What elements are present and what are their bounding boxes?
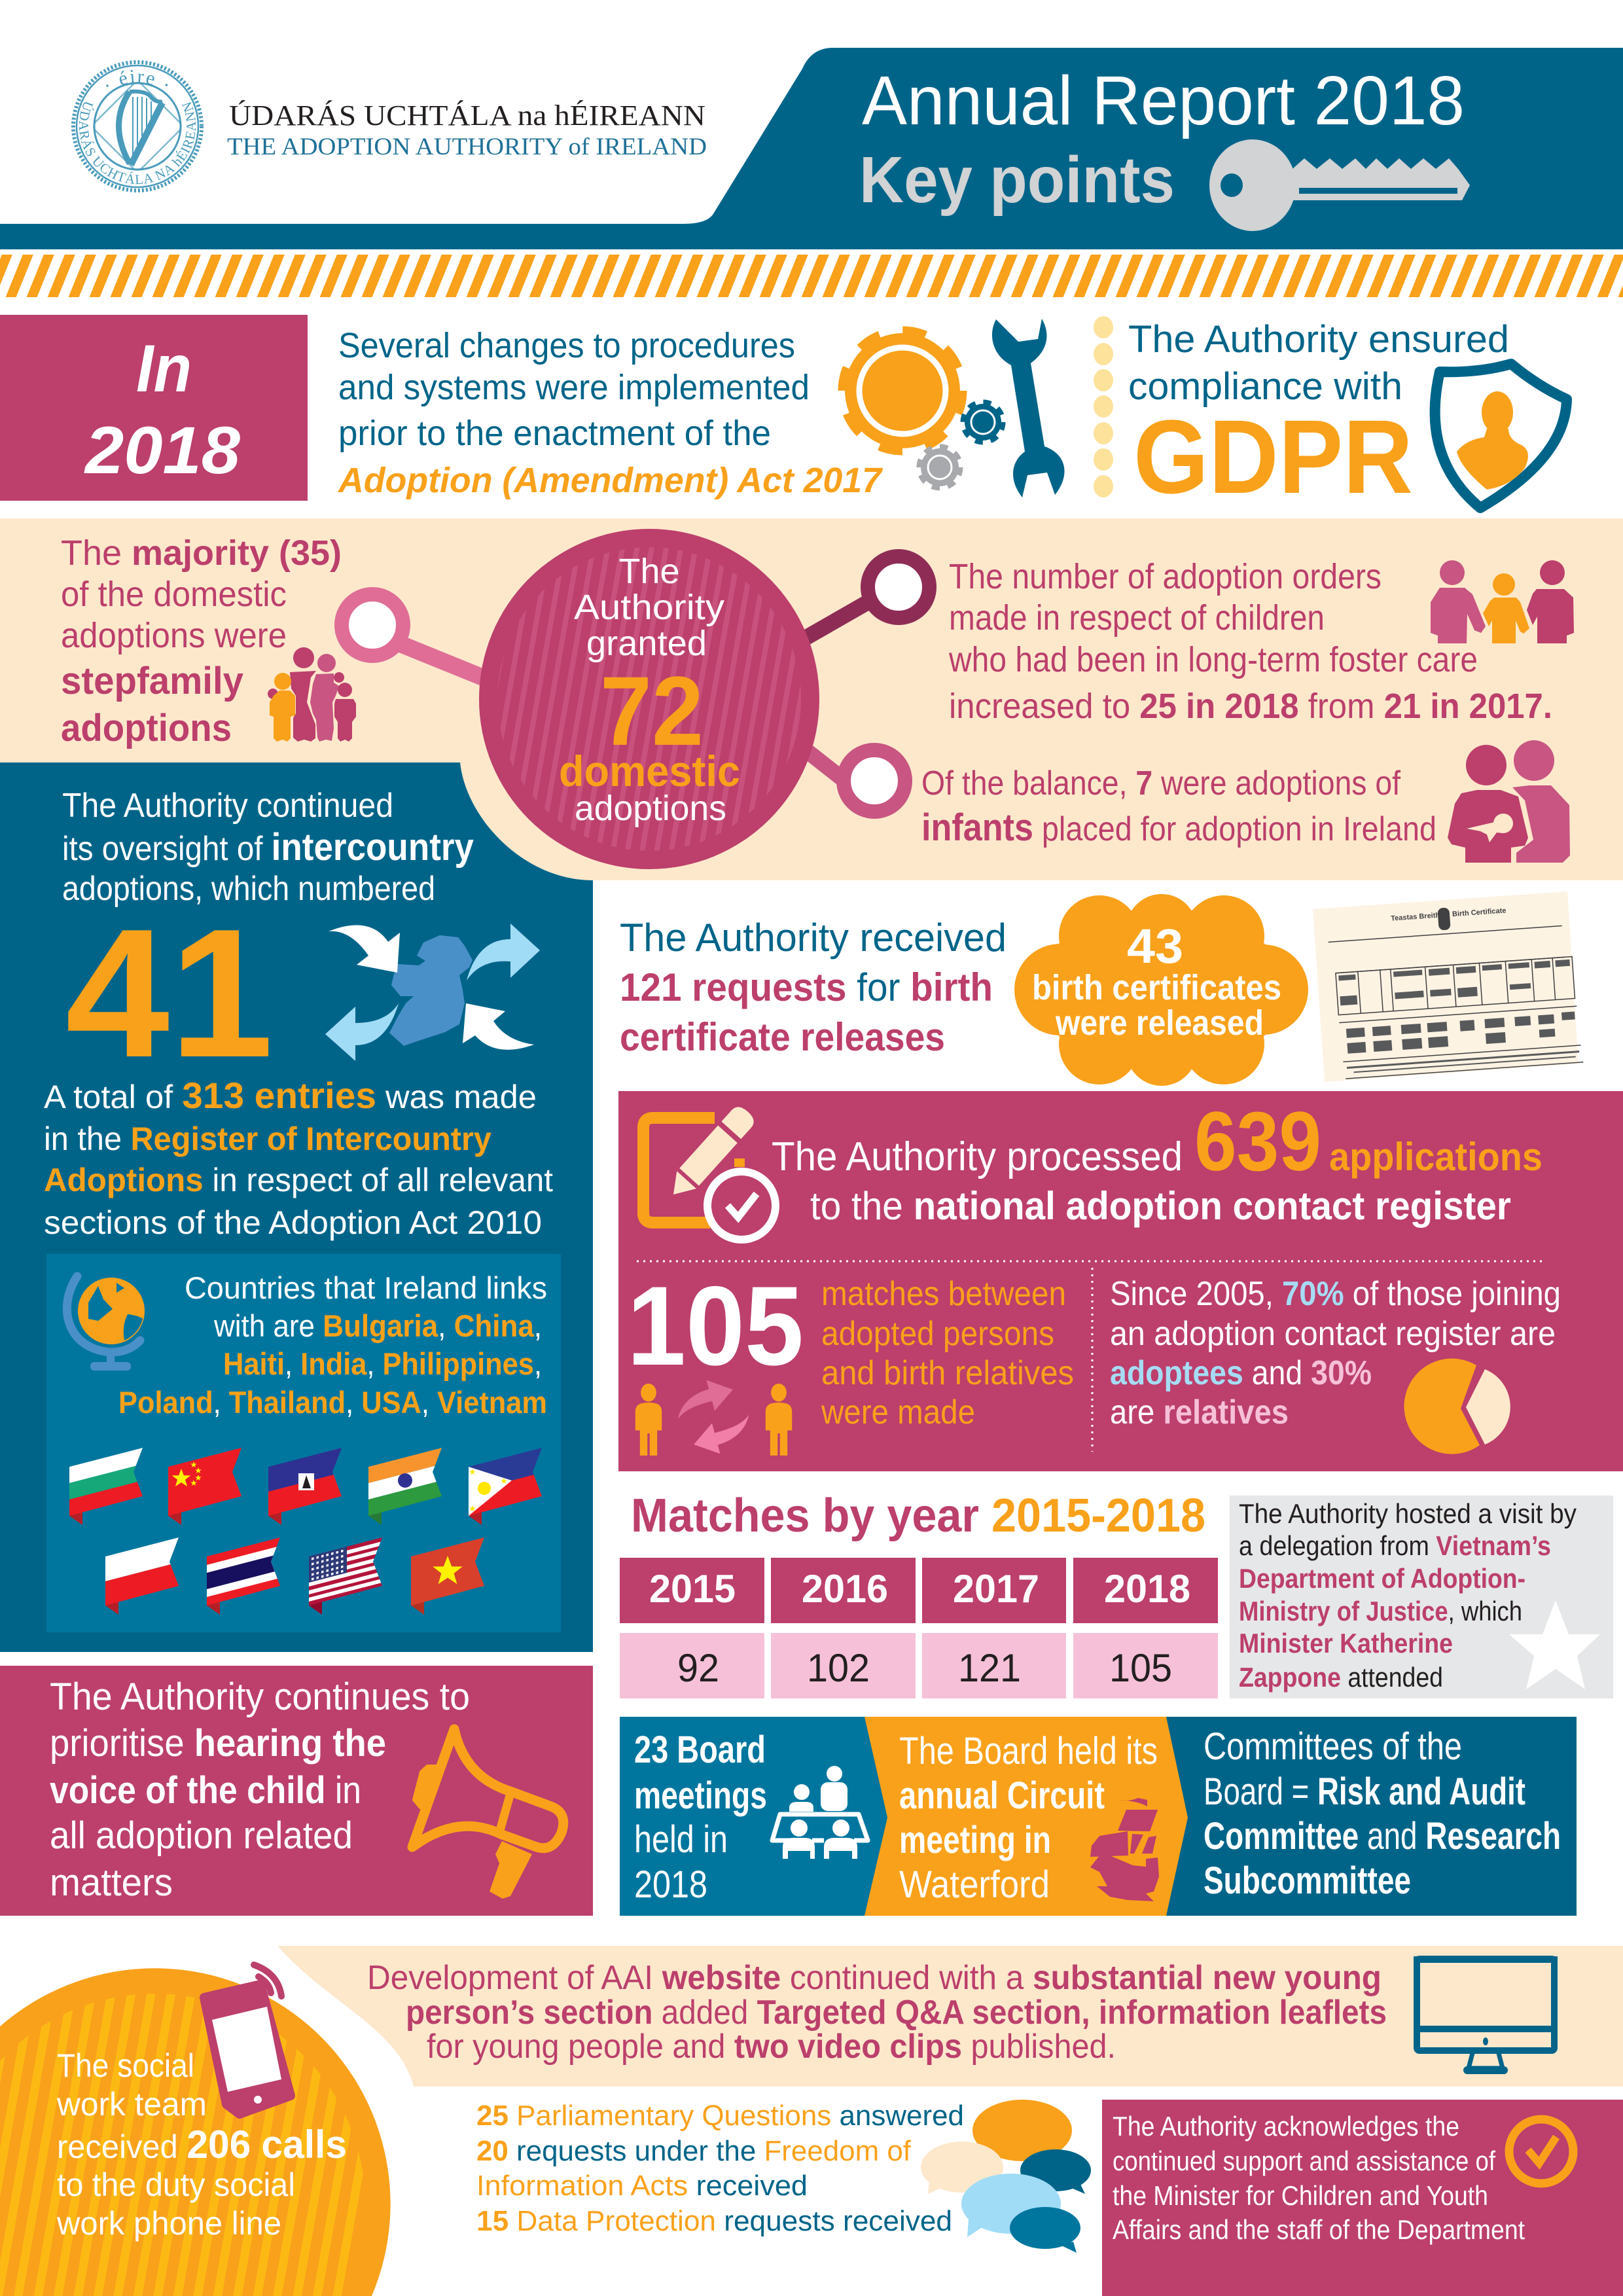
text: majority stepfamily adoptions: adoptions were — [61, 616, 287, 655]
flag: India — [368, 1448, 442, 1525]
text: annual circuit meeting: Waterford — [899, 1863, 1050, 1906]
text: GDPR compliance: GDPR — [1133, 398, 1413, 515]
text: committees of the board — [1204, 1725, 1561, 1902]
table: matches by year: 2017 — [953, 1567, 1039, 1611]
panel: domestic adoptions cream band — [0, 518, 1623, 880]
text: long-term foster care: who had been in long-term foster care — [948, 640, 1478, 679]
icon: ship — [1090, 1798, 1159, 1901]
text: oversight of intercountry — [62, 787, 474, 908]
panel: board activity band — [620, 1717, 1577, 1916]
text: adoptees and relatives: Since 2005, 70% of those joining — [1110, 1275, 1561, 1313]
text: 639 applications: to the national adoption contact register — [810, 1184, 1511, 1228]
central circle: 72 domestic adoptions: 72 — [600, 656, 704, 766]
text: birth certificate requests — [620, 916, 1007, 1059]
text: 23 board meetings — [634, 1729, 767, 1906]
text: oversight of intercountry: adoptions, which numbered — [62, 870, 435, 908]
table: matches by year: 105 — [1109, 1646, 1172, 1690]
icon: check badge — [1509, 2119, 1573, 2183]
panel: national adoption contact register — [618, 1091, 1623, 1471]
icon: stepfamily group — [268, 647, 356, 742]
panel: In 2018: 2018 — [84, 413, 240, 488]
text: annual circuit meeting — [899, 1730, 1158, 1906]
callout: 43 birth certificates cloud: 43 — [1127, 919, 1183, 973]
table: matches by year: 102 — [807, 1646, 870, 1690]
chart: 70/30 pie — [1404, 1359, 1510, 1454]
panel: social work team calls — [0, 1965, 391, 2296]
text: 206 calls: received 206 calls — [57, 2123, 347, 2166]
text: acknowledgement: Affairs and the staff of the Department — [1113, 2214, 1525, 2245]
text: infants placed for adoption: Of the balance, 7 were adoptions of — [921, 764, 1400, 802]
text: 206 calls: The social — [57, 2047, 194, 2084]
text: 639 applications: 639 — [1194, 1095, 1321, 1189]
flag: Philippines — [469, 1448, 542, 1525]
central circle: 72 domestic adoptions: Authority — [574, 588, 724, 627]
text: hearing the voice of the child — [50, 1676, 470, 1904]
flag: Thailand — [207, 1537, 280, 1615]
text: adoptees and relatives: are relatives — [1110, 1393, 1289, 1431]
text: birth certificate requests: certificate releases — [620, 1015, 945, 1059]
text: 23 board meetings: 2018 — [634, 1863, 707, 1906]
panel: intercountry adoptions — [0, 762, 593, 1652]
text: Register of Intercountry Adoptions: A total of 313 entries was made — [44, 1075, 537, 1116]
flag: Vietnam — [411, 1537, 484, 1615]
text: matches made: adopted persons — [821, 1315, 1054, 1353]
image: birth certificate document: Birth Certificate — [1452, 906, 1507, 918]
text: infants placed for adoption: infants placed for adoption in Ireland — [921, 806, 1436, 849]
text: committees of the board: Subcommittee — [1204, 1859, 1411, 1902]
text: 206 calls: work team — [56, 2086, 207, 2123]
text: annual circuit meeting: The Board held its — [899, 1730, 1158, 1772]
connector and ring: foster care — [802, 556, 929, 640]
callout: 43 birth certificates cloud: birth certificates — [1032, 968, 1281, 1007]
text: oversight of intercountry: The Authority continued — [62, 787, 393, 825]
table: matches by year: 2015 — [649, 1567, 736, 1611]
central circle: 72 domestic adoptions: The — [618, 552, 680, 591]
text: committees of the board: Committee and Research — [1204, 1815, 1561, 1857]
text: adoptees and relatives: an adoption contact register are — [1110, 1315, 1556, 1353]
heading: key points: Key points — [859, 143, 1175, 217]
text: hearing the voice of the child: The Authority continues to — [50, 1676, 470, 1718]
text: hearing the voice of the child: all adoption related — [50, 1814, 353, 1857]
text: hearing the voice of the child: matters — [50, 1861, 173, 1904]
text: delegation visit: The Authority hosted a visit by — [1239, 1498, 1577, 1529]
text: GDPR compliance: The Authority ensured — [1128, 318, 1509, 361]
logo seal — [71, 60, 204, 192]
icon: computer monitor — [1414, 1956, 1558, 2074]
icon: shield with person — [1435, 364, 1567, 508]
icon: globe — [67, 1276, 145, 1371]
text: website development — [367, 1959, 1387, 2066]
central circle: 72 domestic adoptions — [479, 529, 819, 869]
icon: board meeting — [772, 1766, 868, 1859]
central circle: 72 domestic adoptions: domestic — [559, 747, 740, 795]
text: website development: person’s section added Targeted Q&A section, information leaflets — [406, 1994, 1387, 2032]
text: acknowledgement: the Minister for Children and Youth — [1113, 2180, 1488, 2211]
text: majority stepfamily adoptions: The majority (35) — [61, 533, 342, 573]
text: committees of the board: Board = Risk and Audit — [1204, 1770, 1525, 1813]
table: matches by year: 121 — [958, 1646, 1021, 1690]
connector and ring: stepfamily — [342, 594, 491, 681]
text: changes to procedures — [337, 326, 883, 500]
text: delegation visit: Zappone attended — [1239, 1662, 1443, 1693]
text: infants placed for adoption — [921, 764, 1436, 849]
text: parliamentary questions and requests: 25 Parliamentary Questions answered — [476, 2100, 964, 2132]
text: 23 board meetings: meetings — [634, 1774, 767, 1817]
icon: document with pen and check — [643, 1103, 776, 1240]
panel: In 2018: In — [136, 331, 192, 406]
text: 639 applications: The Authority processed — [772, 1134, 1183, 1179]
text: long-term foster care: The number of adoption orders — [949, 557, 1382, 596]
text: 23 board meetings: 23 Board — [634, 1729, 766, 1771]
flag: Poland — [105, 1537, 179, 1615]
icon: family of three — [1431, 560, 1574, 643]
logo seal: · éire · — [106, 69, 168, 87]
report title: Annual Report 2018 — [862, 62, 1465, 139]
text: delegation visit — [1239, 1498, 1577, 1693]
text: matches made: matches between — [821, 1275, 1066, 1313]
text: 206 calls: work phone line — [56, 2205, 281, 2242]
decorative dotted divider — [1094, 316, 1113, 497]
text: acknowledgement — [1113, 2111, 1525, 2245]
panel: acknowledgement — [1102, 2100, 1623, 2296]
text: list of countries — [118, 1270, 547, 1420]
heading: matches by year: Matches by year 2015-2018 — [631, 1490, 1205, 1542]
text: majority stepfamily adoptions: stepfamily — [61, 660, 243, 702]
orange hatched stripe — [0, 255, 1623, 297]
text: 23 board meetings: held in — [634, 1818, 728, 1861]
text: long-term foster care: increased to 25 in 2018 from 21 in 2017. — [949, 687, 1552, 726]
text: list of countries: Countries that Ireland links — [185, 1270, 547, 1305]
text: matches made — [821, 1275, 1074, 1431]
text: acknowledgement: continued support and assistance of — [1113, 2145, 1495, 2176]
text: Register of Intercountry Adoptions: in the Register of Intercountry — [44, 1121, 491, 1157]
text: annual circuit meeting: annual Circuit — [899, 1774, 1105, 1817]
text: GDPR compliance: compliance with — [1128, 365, 1402, 408]
text: Register of Intercountry Adoptions: Adoptions in respect of all relevant — [44, 1162, 553, 1198]
table: matches by year: 2018 — [1104, 1567, 1190, 1611]
image: birth certificate document: Teastas Breithe — [1391, 911, 1444, 923]
text: delegation visit: Department of Adoption- — [1239, 1563, 1525, 1594]
icon: megaphone — [412, 1729, 563, 1899]
text: matches made: and birth relatives — [821, 1354, 1074, 1392]
callout: 43 birth certificates cloud — [1014, 894, 1308, 1086]
text: committees of the board: Committees of the — [1204, 1725, 1462, 1768]
text: 639 applications: applications — [1329, 1135, 1543, 1179]
text: majority stepfamily adoptions — [61, 533, 342, 749]
organisation name: THE ADOPTION AUTHORITY of IRELAND — [227, 134, 707, 160]
text: Register of Intercountry Adoptions — [44, 1075, 553, 1241]
text: list of countries: Poland, Thailand, USA, Vietnam — [118, 1385, 547, 1420]
icon: Ireland map with arrows — [325, 924, 540, 1061]
text: parliamentary questions and requests — [476, 2100, 964, 2237]
text: 639 applications — [772, 1095, 1543, 1228]
panel: countries — [46, 1254, 561, 1632]
text: delegation visit: Ministry of Justice, which — [1239, 1596, 1522, 1626]
text: long-term foster care: made in respect of children — [949, 598, 1325, 637]
icon: two people exchanging arrows — [635, 1374, 792, 1460]
text: delegation visit: a delegation from Vietnam’s — [1239, 1530, 1551, 1561]
text: majority stepfamily adoptions: adoptions — [61, 707, 232, 749]
connector and ring: infants — [805, 749, 905, 812]
icon: speech bubbles — [921, 2100, 1091, 2253]
flag: USA — [309, 1537, 382, 1615]
text: list of countries: Haiti, India, Philippines, — [223, 1346, 542, 1381]
icon: gears and wrench — [844, 319, 1065, 497]
flag: China — [168, 1448, 241, 1525]
text: changes to procedures: and systems were implemented — [338, 368, 810, 407]
text: GDPR compliance — [1128, 318, 1509, 515]
flags — [69, 1448, 542, 1615]
callout: 43 birth certificates cloud: were released — [1055, 1003, 1264, 1043]
panel: Vietnam delegation visit — [1230, 1496, 1613, 1698]
text: changes to procedures: prior to the enactment of the — [338, 414, 771, 453]
text: oversight of intercountry: its oversight of intercountry — [62, 826, 474, 869]
big number 41: 41 — [65, 891, 274, 1096]
text: parliamentary questions and requests: 20 requests under the Freedom of — [476, 2135, 912, 2167]
text: matches made: were made — [821, 1393, 975, 1431]
title band shape — [0, 48, 1623, 249]
text: long-term foster care — [948, 557, 1552, 726]
text: list of countries: with are Bulgaria, China, — [213, 1308, 542, 1343]
text: delegation visit: Minister Katherine — [1239, 1628, 1453, 1659]
text: annual circuit meeting: meeting in — [899, 1819, 1051, 1861]
text: adoptees and relatives: adoptees and 30% — [1110, 1354, 1372, 1392]
icon: mobile phone — [204, 1965, 291, 2114]
logo seal: ÚDARÁS UCHTÁLA NA hÉIREANN — [79, 102, 196, 185]
flag: Bulgaria — [69, 1448, 143, 1525]
text: website development: for young people and two video clips published. — [427, 2028, 1116, 2066]
organisation name — [227, 99, 707, 160]
header band — [0, 48, 1623, 249]
text: hearing the voice of the child: prioritise hearing the — [50, 1722, 386, 1765]
icon: key — [1209, 139, 1470, 231]
table: matches by year — [620, 1558, 1218, 1698]
image: birth certificate document — [1313, 891, 1583, 1082]
panel: voice of the child — [0, 1666, 593, 1916]
organisation name: ÚDARÁS UCHTÁLA na hÉIREANN — [229, 99, 705, 132]
flag: Haiti — [268, 1448, 342, 1525]
icon: white star — [1509, 1600, 1600, 1689]
text: acknowledgement: The Authority acknowledges the — [1113, 2111, 1459, 2142]
text: parliamentary questions and requests: Information Acts received — [476, 2170, 808, 2202]
text: birth certificate requests: The Authority received — [620, 916, 1007, 960]
table: matches by year: 92 — [677, 1646, 719, 1690]
text: parliamentary questions and requests: 15 Data Protection requests received — [476, 2205, 952, 2237]
text: majority stepfamily adoptions: of the domestic — [61, 575, 287, 614]
panel: In 2018 — [0, 315, 308, 501]
text: adoptees and relatives — [1110, 1275, 1561, 1431]
text: changes to procedures: Several changes to procedures — [338, 326, 795, 365]
text: changes to procedures: Adoption (Amendment) Act 2017 — [337, 461, 883, 500]
text: website development: Development of AAI website continued with a substantial new young — [367, 1959, 1382, 1997]
table: matches by year: 2016 — [802, 1567, 888, 1611]
text: hearing the voice of the child: voice of the child in — [50, 1769, 361, 1812]
text: Register of Intercountry Adoptions: sections of the Adoption Act 2010 — [44, 1204, 542, 1241]
icon: parent holding infant — [1448, 740, 1570, 863]
central circle: 72 domestic adoptions: granted — [586, 624, 707, 663]
text: birth certificate requests: 121 requests for birth — [620, 965, 993, 1009]
text: 206 calls: to the duty social — [57, 2166, 295, 2203]
panel: website development — [277, 1946, 1623, 2087]
big number 105: 105 — [627, 1263, 804, 1389]
central circle: 72 domestic adoptions: adoptions — [575, 789, 726, 828]
text: 206 calls — [56, 2047, 347, 2242]
